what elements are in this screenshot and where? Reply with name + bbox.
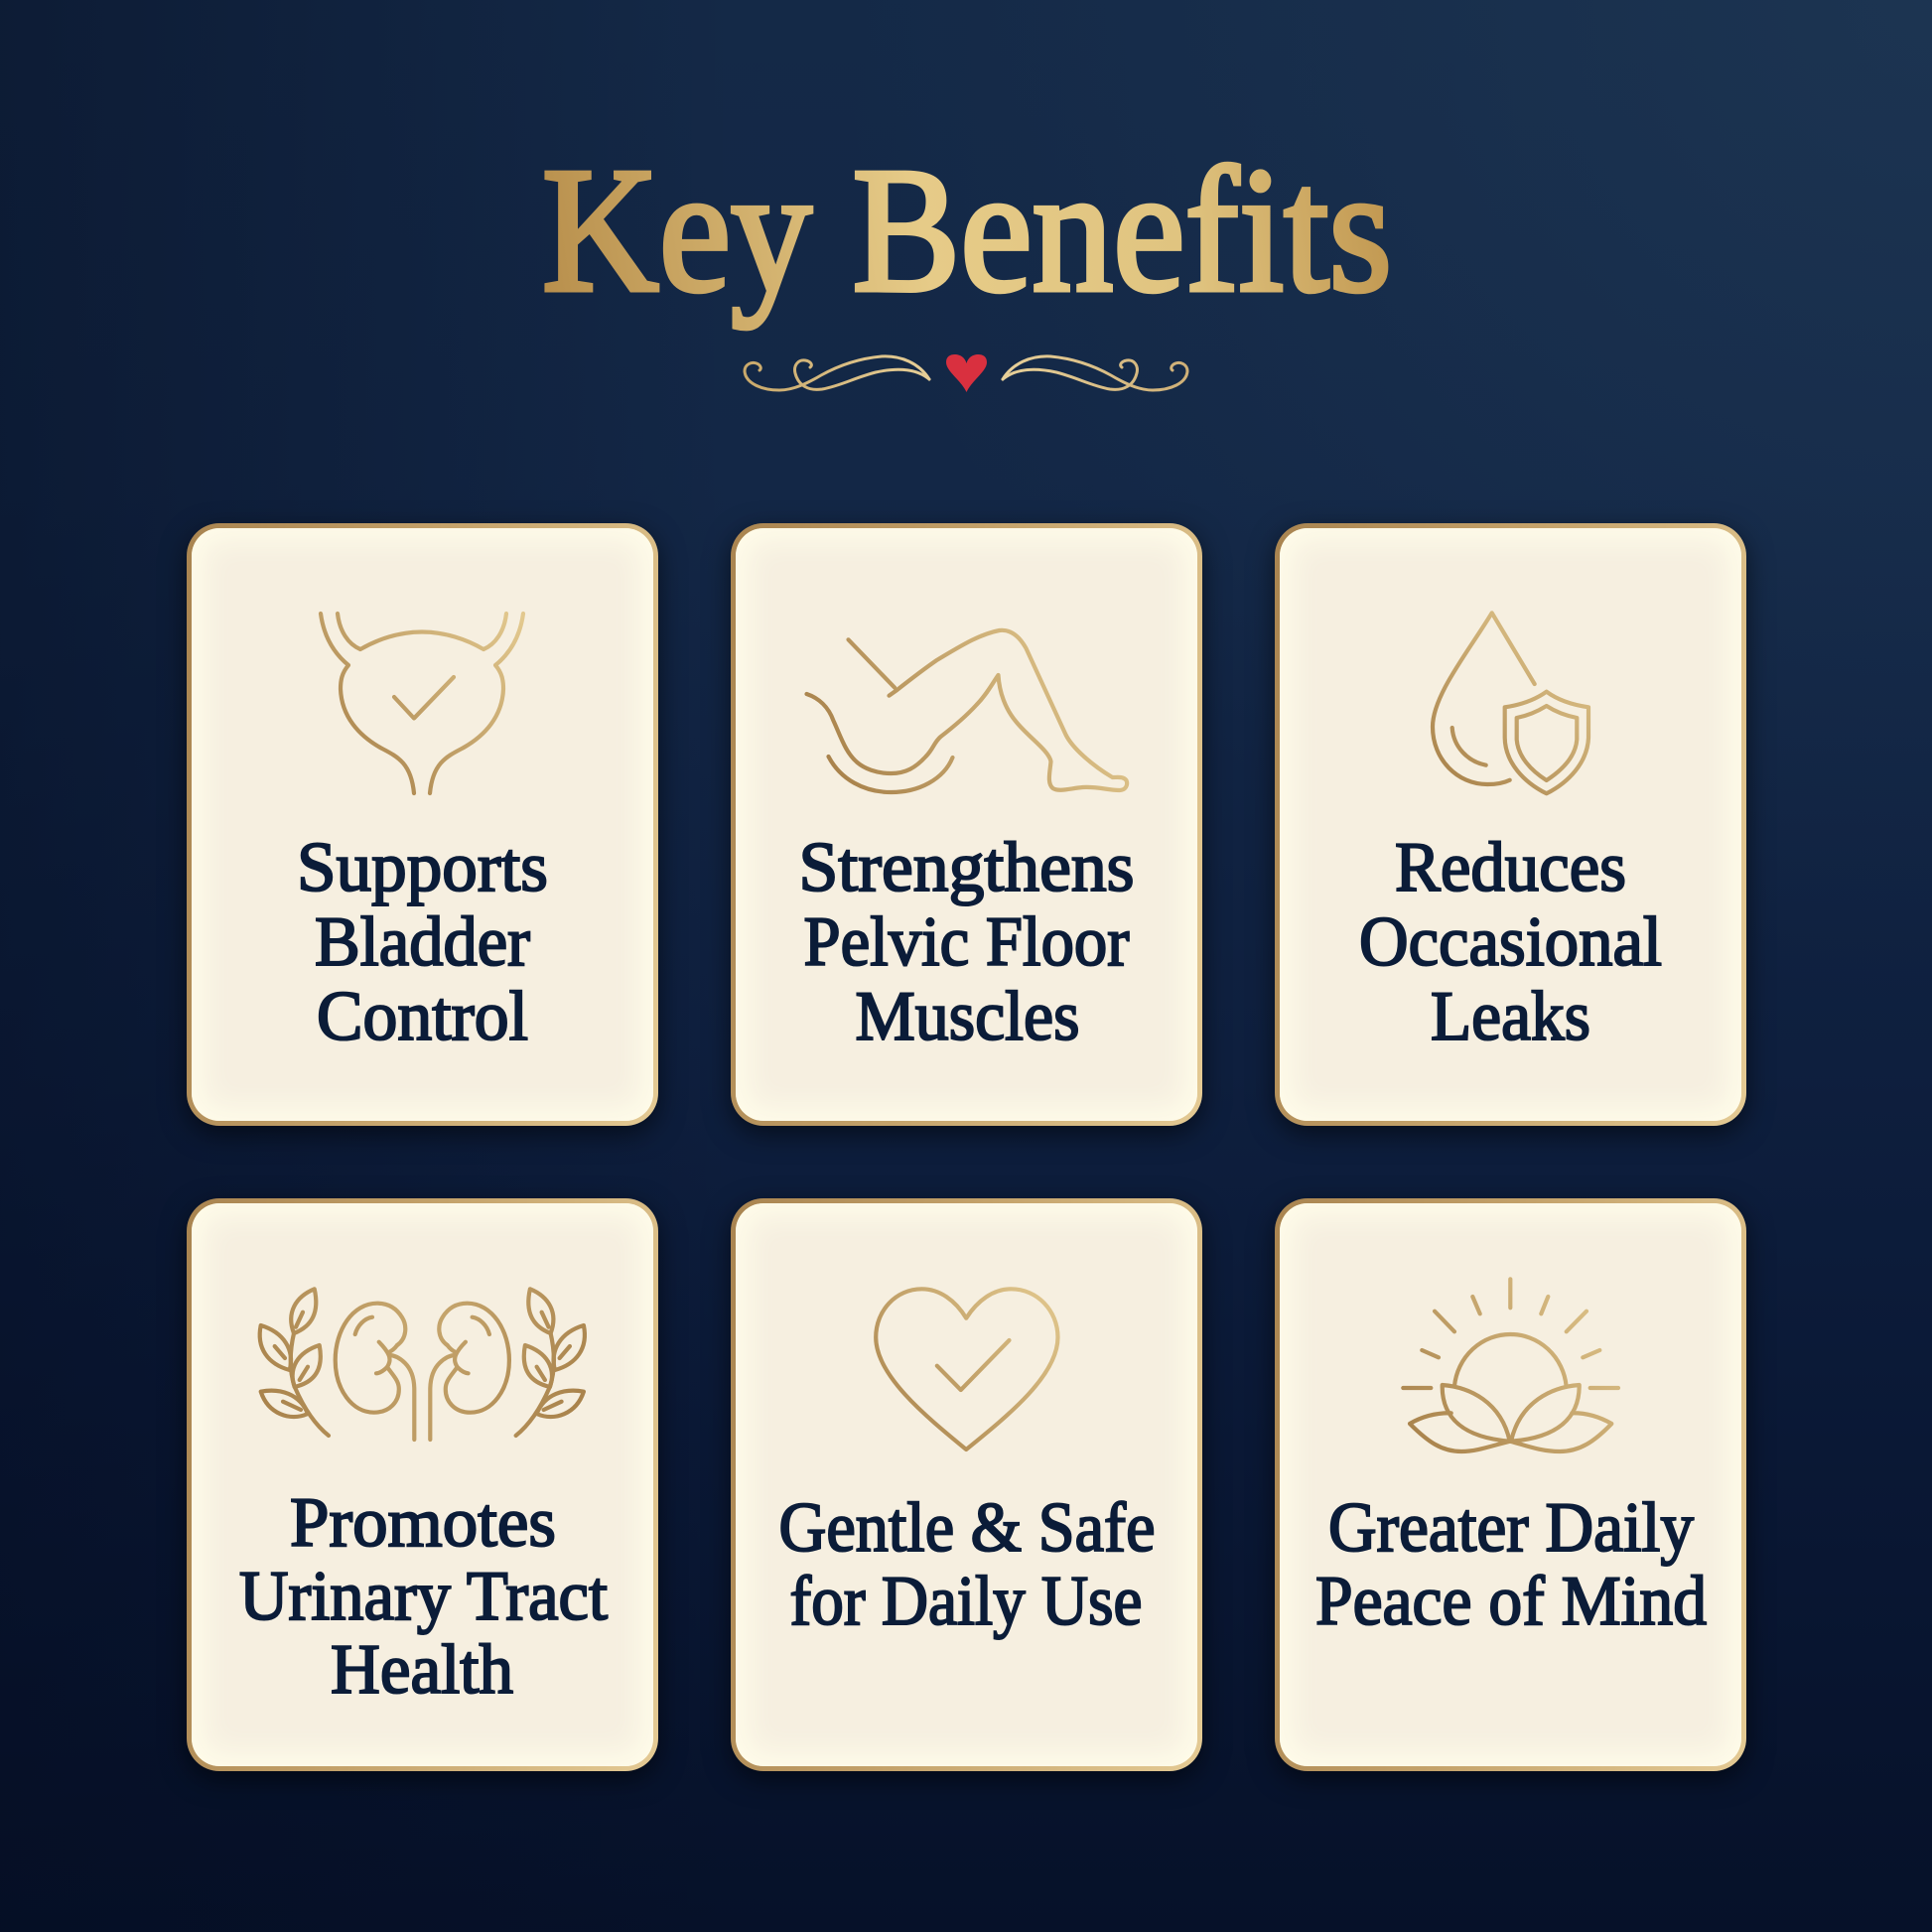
label: Promotes Urinary Tract Health: Promotes: [290, 1484, 556, 1562]
panel: Supports Bladder Control: [187, 523, 658, 1126]
label: Supports Bladder Control: Supports: [297, 829, 548, 906]
label: Promotes Urinary Tract Health: [239, 1484, 608, 1709]
label: Reduces Occasional Leaks: Leaks: [1431, 978, 1590, 1055]
label: Supports Bladder Control: Bladder: [315, 903, 530, 981]
panel: Greater Daily Peace of Mind: [1275, 1198, 1746, 1771]
label: Greater Daily Peace of Mind: Greater Daily: [1328, 1489, 1694, 1567]
panel: Reduces Occasional Leaks: [1275, 523, 1746, 1126]
label: Strengthens Pelvic Floor Muscles: Pelvic Floor: [803, 903, 1129, 981]
label: Strengthens Pelvic Floor Muscles: Strengthens: [798, 829, 1134, 906]
label: Gentle & Safe for Daily Use: for Daily Use: [789, 1563, 1142, 1640]
panel: Strengthens Pelvic Floor Muscles: [731, 523, 1201, 1126]
label: Reduces Occasional Leaks: Reduces: [1395, 829, 1626, 906]
label: Gentle & Safe for Daily Use: Gentle & Safe: [778, 1489, 1155, 1567]
label: Gentle & Safe for Daily Use: [778, 1489, 1155, 1640]
label: Supports Bladder Control: [297, 829, 548, 1055]
icon: bent leg: [806, 630, 1127, 792]
label: Greater Daily Peace of Mind: Peace of Mind: [1315, 1563, 1707, 1640]
ornament: flourish and red heart: [743, 354, 1189, 392]
label: Strengthens Pelvic Floor Muscles: Muscles: [855, 978, 1079, 1055]
panel: Promotes Urinary Tract Health: [187, 1198, 658, 1771]
label: Promotes Urinary Tract Health: Urinary Tract: [239, 1558, 608, 1635]
label: Strengthens Pelvic Floor Muscles: [798, 829, 1134, 1055]
icon: kidneys with laurel branches: [260, 1289, 585, 1440]
icon: sun rising over lotus: [1403, 1279, 1618, 1451]
label: Reduces Occasional Leaks: Occasional: [1359, 903, 1662, 981]
panel: Gentle & Safe for Daily Use: [731, 1198, 1201, 1771]
icon: bladder with check: [321, 614, 523, 793]
icon: drop and shield: [1433, 613, 1588, 793]
label: Greater Daily Peace of Mind: [1315, 1489, 1707, 1640]
label: Promotes Urinary Tract Health: Health: [331, 1631, 513, 1709]
icon: heart with check: [876, 1289, 1057, 1449]
label: Reduces Occasional Leaks: [1359, 829, 1662, 1055]
label: Supports Bladder Control: Control: [317, 978, 528, 1055]
